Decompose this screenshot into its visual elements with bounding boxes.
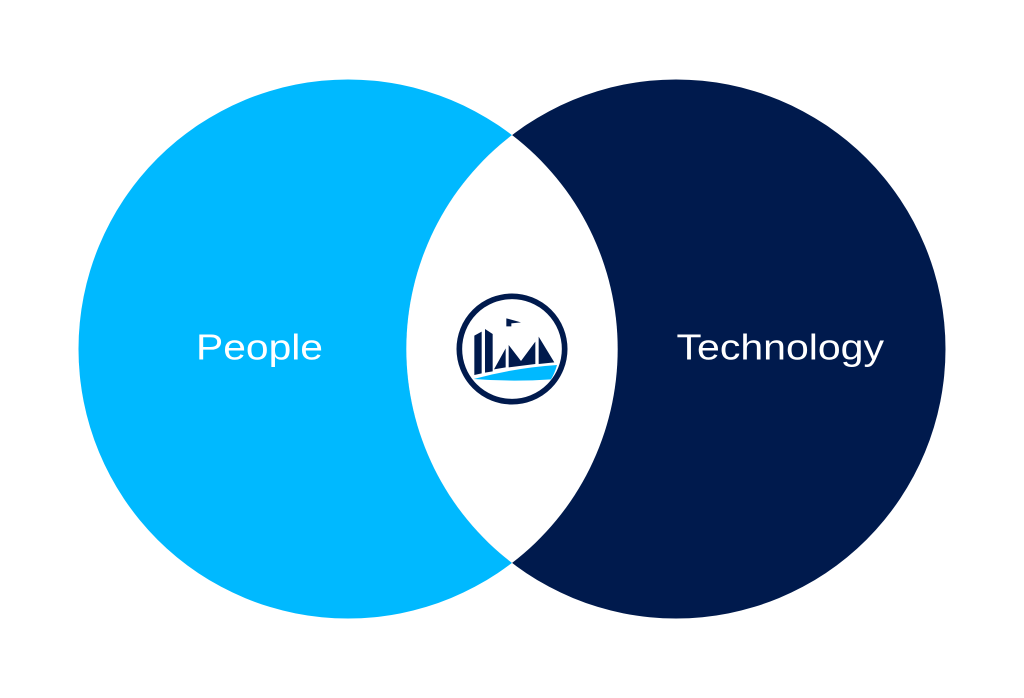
icon: central logo (459, 296, 565, 402)
logo ring (459, 296, 565, 402)
circle: people (78, 80, 618, 618)
label: technology: Technology (676, 326, 884, 368)
logo water (474, 365, 557, 381)
circle: technology (406, 80, 946, 618)
logo flag (506, 318, 521, 326)
logo skyline (474, 329, 554, 375)
label: people: People (196, 326, 323, 368)
overlap: white intersection (406, 135, 618, 563)
